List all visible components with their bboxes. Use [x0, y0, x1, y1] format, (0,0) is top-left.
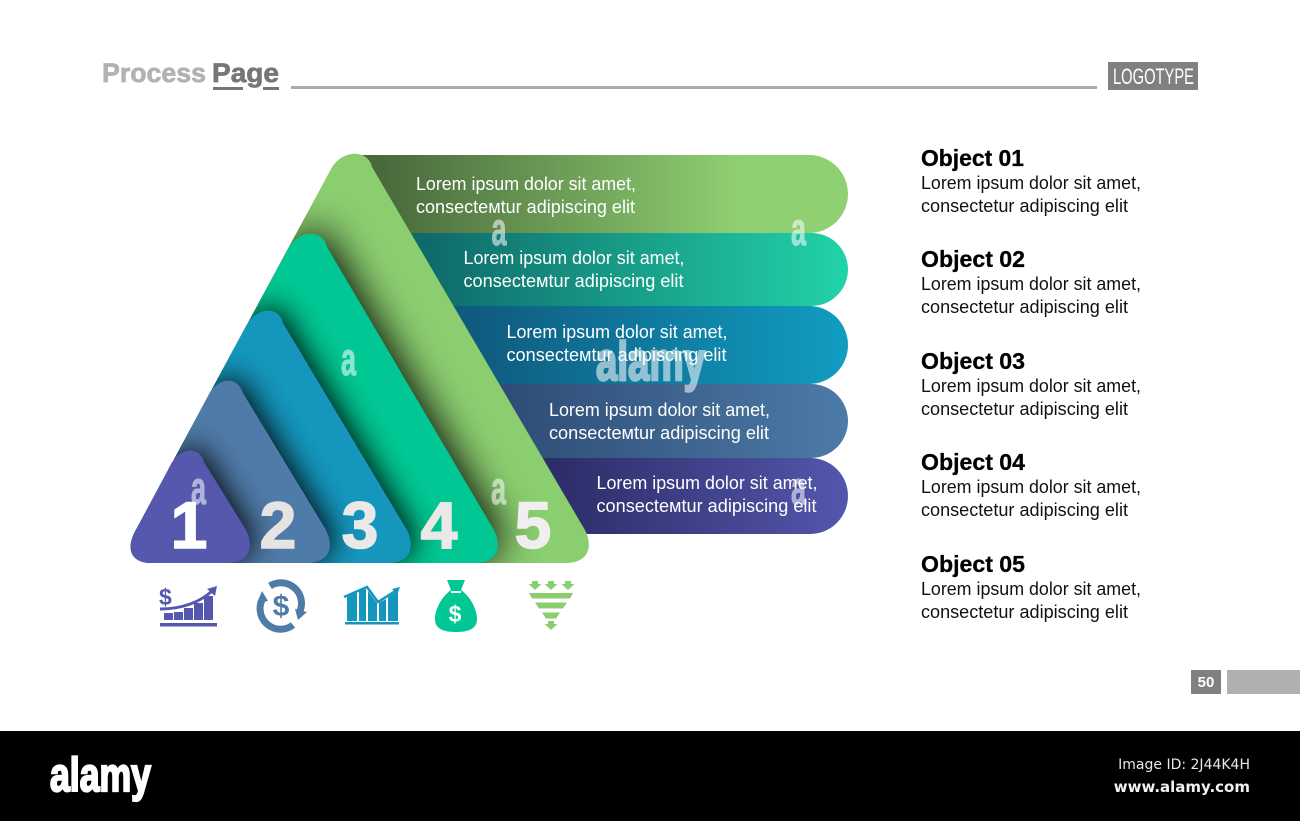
band 3: Lorem ipsum dolor sit amet, [506, 322, 728, 342]
triangle 1 [131, 450, 250, 563]
object 04: Object 04 [921, 449, 1025, 475]
step numbers: 4 [421, 488, 458, 562]
pyramid of nested triangles [131, 154, 589, 563]
icon: money bag [435, 580, 477, 632]
header: title: Process [102, 58, 206, 88]
band 4: consecteмtur adipiscing elit [549, 423, 769, 443]
object 02: Object 02 [921, 246, 1025, 272]
band 5: Lorem ipsum dolor sit amet, [596, 473, 818, 493]
triangle 5 [131, 154, 589, 563]
band 4: Lorem ipsum dolor sit amet, [549, 400, 770, 420]
image id: Image ID: 2J44K4H [1118, 757, 1250, 773]
object 02: Lorem ipsum dolor sit amet, [921, 274, 1141, 294]
object 04: Lorem ipsum dolor sit amet, [921, 477, 1141, 497]
step numbers: 1 [171, 488, 207, 562]
triangle 2 [131, 381, 330, 563]
object 05 [921, 551, 1141, 622]
object 03: Object 03 [921, 348, 1025, 374]
object 02 [921, 246, 1141, 317]
header: title [102, 58, 279, 90]
object 01: Lorem ipsum dolor sit amet, [921, 173, 1141, 193]
icon: rising chart with dollar [159, 584, 217, 626]
watermark: a [791, 462, 806, 514]
object descriptions [921, 145, 1141, 622]
watermark: a [491, 462, 506, 514]
band 3: consecteмtur adipiscing elit [506, 345, 726, 365]
object 05: Lorem ipsum dolor sit amet, [921, 579, 1141, 599]
object 01: consectetur adipiscing elit [921, 196, 1128, 216]
band 1: Lorem ipsum dolor sit amet, [416, 174, 636, 194]
band 2: consecteмtur adipiscing elit [464, 271, 684, 291]
bands with text [355, 155, 848, 534]
watermark: alamy [596, 330, 705, 392]
watermark: a [791, 203, 806, 255]
watermark [191, 203, 806, 514]
object 04 [921, 449, 1141, 520]
triangle 4 [131, 234, 498, 563]
watermark: a [492, 203, 507, 255]
band 1: consecteмtur adipiscing elit [416, 197, 635, 217]
triangle 3 [131, 311, 411, 563]
website: www.alamy.com [1114, 778, 1250, 796]
icon: dollar cycle [257, 583, 307, 629]
logotype badge: LOGOTYPE [1113, 64, 1194, 89]
watermark: a [341, 333, 356, 385]
step numbers [171, 488, 551, 562]
object 05: consectetur adipiscing elit [921, 602, 1128, 622]
band 1 [355, 155, 848, 233]
band 5: consecteмtur adipiscing elit [596, 496, 816, 516]
watermark: a [191, 462, 206, 514]
band 2: Lorem ipsum dolor sit amet, [464, 248, 684, 268]
object 03 [921, 348, 1141, 419]
step numbers: 5 [515, 488, 551, 562]
logotype badge [1108, 62, 1198, 90]
icon: dollar cycle: $ [273, 590, 290, 623]
object 04: consectetur adipiscing elit [921, 500, 1128, 520]
icon: rising chart with dollar: $ [159, 584, 172, 610]
step numbers: 2 [260, 488, 296, 562]
step numbers: 3 [342, 488, 378, 562]
header rule [291, 86, 1097, 89]
object 02: consectetur adipiscing elit [921, 297, 1128, 317]
icon: money bag: $ [449, 601, 462, 627]
object 03: consectetur adipiscing elit [921, 399, 1128, 419]
band 4 [490, 384, 848, 458]
footer bar [0, 731, 1300, 821]
object 01 [921, 145, 1141, 216]
page number: 50 [1198, 674, 1214, 691]
band 3 [440, 306, 848, 384]
footer logo: alamy [50, 748, 151, 801]
header: title: Page [212, 58, 279, 88]
object 05: Object 05 [921, 551, 1025, 577]
band 2 [400, 233, 848, 306]
icon: area chart with arrow [344, 587, 400, 624]
object 01: Object 01 [921, 145, 1024, 171]
band 5 [540, 458, 848, 534]
icon: funnel [528, 581, 574, 630]
page number [1191, 670, 1300, 694]
object 03: Lorem ipsum dolor sit amet, [921, 376, 1141, 396]
